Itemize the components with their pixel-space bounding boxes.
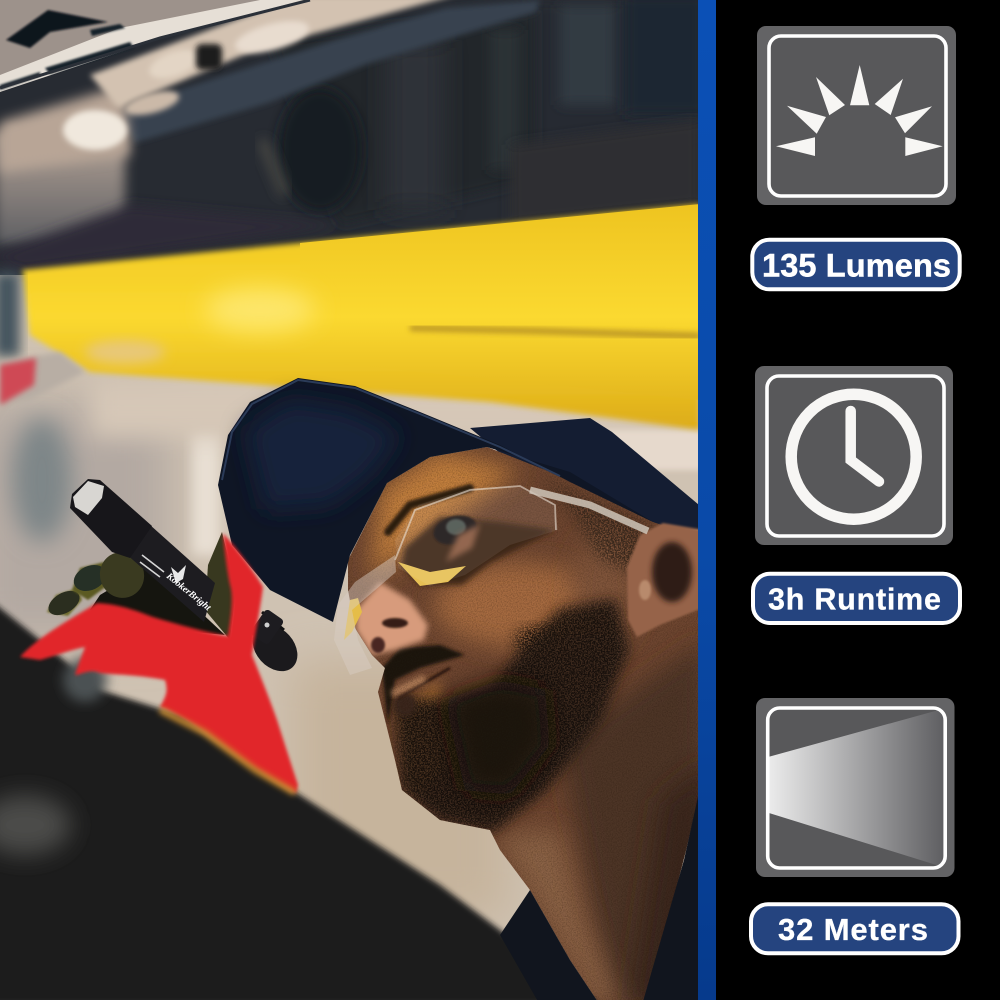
beard: [382, 600, 628, 832]
skin grain: [340, 440, 705, 1000]
skin tones: [370, 450, 710, 1000]
feature: lumens: [752, 26, 960, 289]
photo background: car underside: [0, 0, 705, 275]
photo background: lower wall and floor: [0, 275, 698, 1000]
flashlight body: [130, 526, 215, 622]
nose: [356, 582, 428, 655]
cap crown: [470, 418, 705, 530]
label: 32 Meters: 32 Meters: [778, 912, 928, 947]
photo background: yellow lift beam: [0, 204, 700, 430]
icon: light beam: [756, 698, 954, 877]
glove cuff orange fringe: [160, 710, 295, 793]
flashlight tail cap: [252, 628, 298, 672]
label: 3h Runtime: 3h Runtime: [768, 582, 941, 616]
label: 135 Lumens: [752, 240, 960, 289]
cap brim: [218, 378, 653, 622]
face and neck: [340, 440, 710, 1000]
right panel background: [716, 0, 1000, 1000]
flashlight lens: [73, 481, 104, 515]
work shirt: [500, 797, 698, 1000]
label: 32 Meters: [751, 904, 958, 953]
safety glasses: [334, 486, 648, 675]
icon: clock: [755, 366, 953, 545]
foreground dark engine bay: [0, 600, 600, 1000]
flashlight logo mark: [171, 565, 186, 583]
label: 135 Lumens: 135 Lumens: [762, 248, 951, 284]
photo: mechanic inspecting under a car with a flashlight: [0, 0, 710, 1000]
label: 3h Runtime: [753, 574, 960, 623]
eyebrow: [388, 488, 470, 532]
flashlight: [70, 479, 307, 680]
flashlight brand name: KookerBright: [163, 571, 213, 613]
red glove: [20, 533, 298, 793]
gloved hand fingers: [44, 532, 236, 640]
blue divider stripe: [698, 0, 716, 1000]
flashlight head: [70, 479, 152, 558]
feature: runtime: [753, 366, 960, 623]
ear: [627, 523, 705, 637]
feature: beam distance: [751, 698, 958, 953]
icon: sunrise: [757, 26, 956, 205]
